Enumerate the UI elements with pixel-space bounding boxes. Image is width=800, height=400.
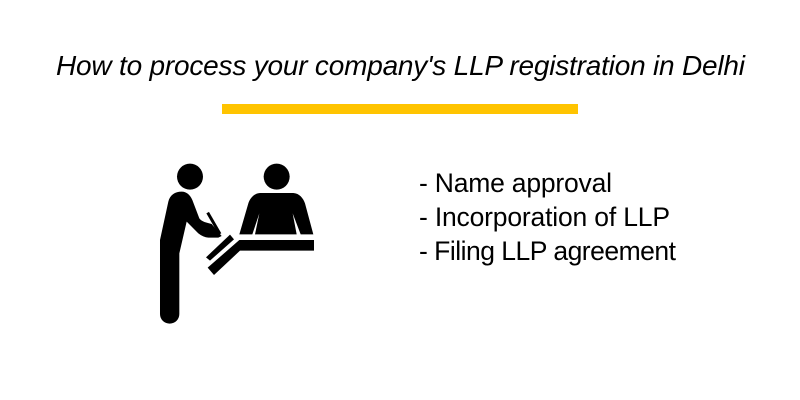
step 2: - Incorporation of LLP <box>419 202 670 232</box>
icon: person filling a form at a service desk <box>160 164 314 324</box>
step 3: - Filing LLP agreement <box>419 236 677 266</box>
step 1: - Name approval <box>419 168 612 198</box>
seated person head <box>264 164 290 190</box>
title: How to process your company's LLP registration in Delhi <box>56 50 746 81</box>
desk <box>208 240 314 275</box>
form on desk edge <box>206 235 234 261</box>
standing person body <box>160 192 222 324</box>
steps list <box>419 168 677 266</box>
pen <box>208 213 220 234</box>
standing person head <box>177 164 203 190</box>
accent bar <box>222 104 578 114</box>
seated person body <box>239 193 313 234</box>
